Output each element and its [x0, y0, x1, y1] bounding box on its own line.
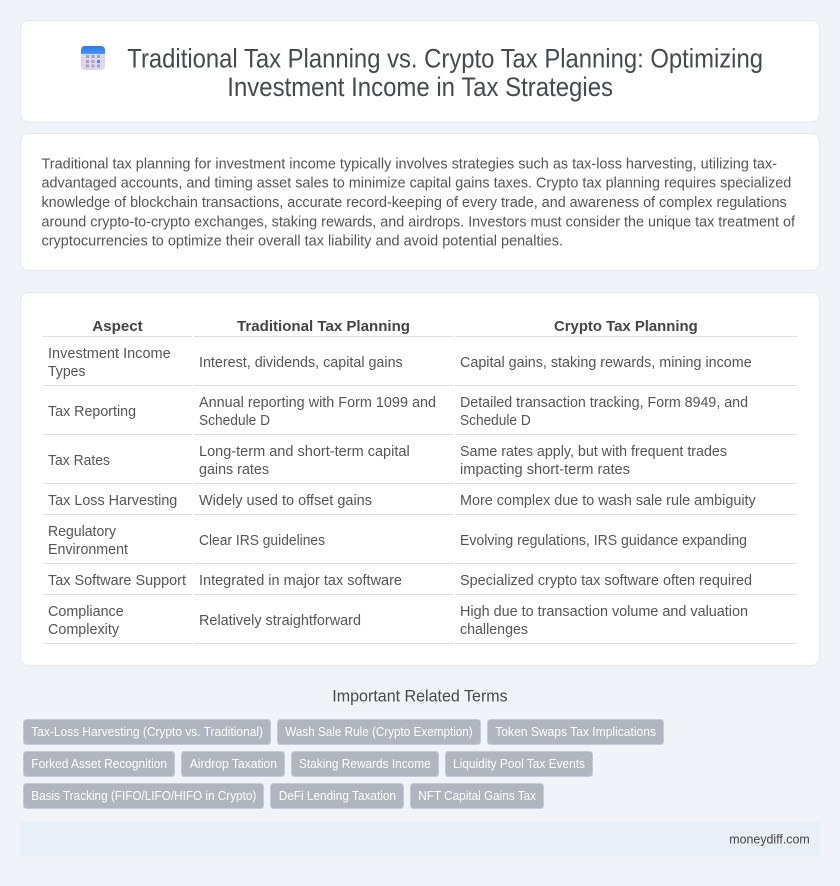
tag: defi lending — [270, 784, 404, 808]
row: investment income types: Capital gains, staking rewards, mining income — [460, 355, 752, 371]
table header row: Traditional Tax Planning — [237, 318, 410, 335]
row: investment income types: Types — [48, 364, 86, 380]
text block: introduction paragraph: Traditional tax planning for investment income typically involves strategies such as tax-loss harvesting, utilizing tax- — [42, 155, 777, 172]
tag: forked asset recognition: Forked Asset Recognition — [31, 756, 167, 771]
row: tax reporting — [48, 395, 748, 429]
title — [127, 44, 763, 102]
row: compliance complexity: Relatively straightforward — [199, 613, 361, 629]
row: regulatory environment: Regulatory — [48, 524, 117, 540]
text block: introduction paragraph: around crypto-to-crypto exchanges, staking rewards, and airdrops. Investors must consider the unique tax treatment of — [42, 213, 796, 230]
tag: airdrop taxation — [182, 752, 284, 776]
text block: introduction paragraph: advantaged accounts, and timing asset sales to minimize capital gains taxes. Crypto tax planning requires specialized — [42, 175, 791, 192]
row: tax loss harvesting: Widely used to offset gains — [199, 493, 372, 509]
panel: introduction — [20, 134, 820, 270]
row: compliance complexity: Compliance — [48, 604, 124, 620]
tag: tax-loss harvesting: Tax-Loss Harvesting (Crypto vs. Traditional) — [31, 724, 263, 739]
row: compliance complexity — [48, 604, 748, 638]
footer — [20, 822, 820, 856]
tag: wash sale rule: Wash Sale Rule (Crypto Exemption) — [285, 724, 473, 739]
text block: introduction paragraph — [42, 155, 796, 250]
footer: moneydiff.com — [729, 831, 810, 846]
row: regulatory environment: Evolving regulations, IRS guidance expanding — [460, 533, 747, 549]
tag: token swaps: Token Swaps Tax Implications — [495, 724, 656, 739]
row: compliance complexity: High due to transaction volume and valuation — [460, 604, 748, 620]
row: investment income types: Interest, dividends, capital gains — [199, 355, 403, 371]
tag: basis tracking — [24, 784, 264, 808]
panel: comparison table — [20, 292, 820, 666]
tag: basis tracking: Basis Tracking (FIFO/LIFO/HIFO in Crypto) — [31, 788, 256, 803]
tag: staking rewards income — [292, 752, 438, 776]
text block: introduction paragraph: knowledge of blockchain transactions, accurate record-keeping of every trade, and awareness of complex regulations — [42, 194, 787, 211]
row: tax reporting: Annual reporting with Form 1099 and — [199, 395, 436, 411]
tag: nft capital gains — [410, 784, 544, 808]
tag: token swaps — [488, 720, 664, 744]
tag: wash sale rule — [278, 720, 480, 744]
row: tax software support: Specialized crypto tax software often required — [460, 573, 752, 589]
row: tax rates: Long-term and short-term capital — [199, 444, 410, 460]
row: regulatory environment — [48, 524, 747, 558]
tag: liquidity pool: Liquidity Pool Tax Events — [453, 756, 585, 771]
table header row: Aspect — [92, 318, 143, 335]
text block: introduction paragraph: cryptocurrencies to optimize their overall tax liability and avoid potential penalties. — [42, 233, 563, 250]
row: tax rates: Same rates apply, but with frequent trades — [460, 444, 727, 460]
panel: related term tags — [24, 720, 664, 808]
row: tax reporting: Schedule D — [460, 413, 531, 429]
row: investment income types: Investment Income — [48, 346, 171, 362]
row: tax reporting: Detailed transaction tracking, Form 8949, and — [460, 395, 748, 411]
panel: header — [20, 20, 820, 122]
row: tax loss harvesting: Tax Loss Harvesting — [48, 493, 177, 509]
row: tax reporting: Schedule D — [199, 413, 270, 429]
row: tax software support: Integrated in major tax software — [199, 573, 402, 589]
row: tax rates: Tax Rates — [48, 453, 110, 469]
title: Traditional Tax Planning vs. Crypto Tax Planning: Optimizing — [127, 44, 763, 74]
row: tax reporting: Tax Reporting — [48, 404, 136, 420]
row: tax loss harvesting — [48, 493, 756, 509]
tag: defi lending: DeFi Lending Taxation — [279, 788, 396, 803]
row: compliance complexity: challenges — [460, 622, 528, 638]
table header row — [92, 318, 698, 335]
tag: staking rewards income: Staking Rewards Income — [299, 756, 431, 771]
row: regulatory environment: Clear IRS guidelines — [199, 533, 325, 549]
tag: nft capital gains: NFT Capital Gains Tax — [418, 788, 537, 803]
tag: tax-loss harvesting — [24, 720, 270, 744]
row: tax rates — [48, 444, 727, 478]
row: regulatory environment: Environment — [48, 542, 128, 558]
row: tax rates: gains rates — [199, 462, 269, 478]
row: investment income types — [48, 346, 752, 380]
heading: important related terms: Important Related Terms — [332, 687, 508, 706]
row: compliance complexity: Complexity — [48, 622, 120, 638]
row: tax loss harvesting: More complex due to wash sale rule ambiguity — [460, 493, 756, 509]
tag: liquidity pool — [446, 752, 592, 776]
table rules — [43, 336, 797, 644]
title: Investment Income in Tax Strategies — [227, 72, 613, 102]
table header row: Crypto Tax Planning — [554, 318, 698, 335]
row: tax software support — [48, 573, 752, 589]
icon: calendar — [81, 46, 105, 70]
tag: airdrop taxation: Airdrop Taxation — [190, 756, 277, 771]
tag: forked asset recognition — [24, 752, 174, 776]
row: tax software support: Tax Software Support — [48, 573, 186, 589]
row: tax rates: impacting short-term rates — [460, 462, 630, 478]
